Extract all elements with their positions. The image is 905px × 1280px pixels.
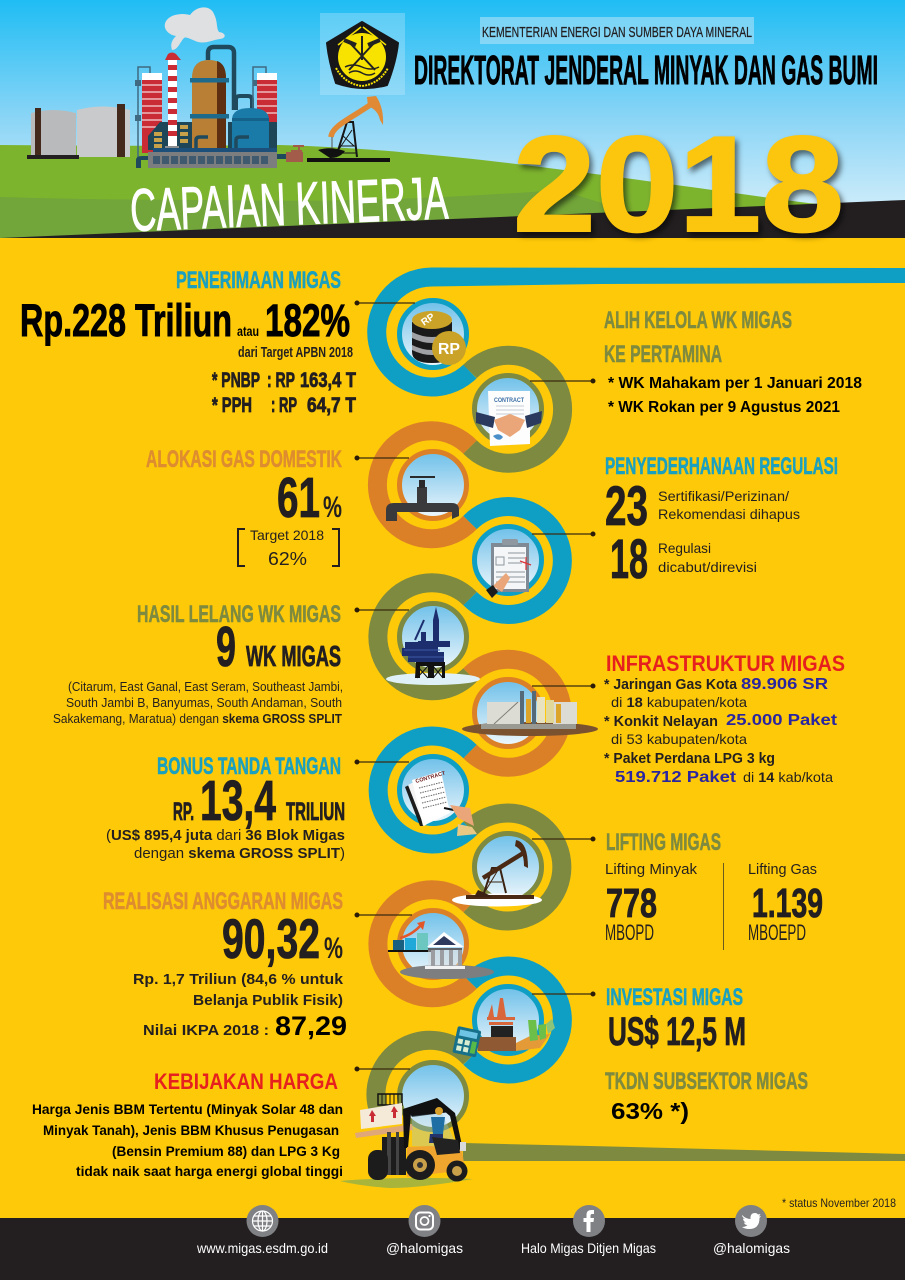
panel: investasi migas: INVESTASI MIGAS — [606, 984, 743, 1011]
panel: alokasi gas domestik: 61 — [277, 466, 320, 530]
icon: contract handshake — [476, 391, 542, 446]
panel: kebijakan harga — [32, 1069, 343, 1179]
panel: tkdn — [605, 1068, 808, 1124]
panel: bonus tanda tangan: BONUS TANDA TANGAN — [157, 753, 341, 780]
ministry name: KEMENTERIAN ENERGI DAN SUMBER DAYA MINERAL — [482, 24, 752, 41]
panel: realisasi anggaran: 87,29 — [275, 1011, 347, 1041]
panel: penerimaan migas: 64,7 T — [307, 394, 356, 417]
icon: budget bank — [388, 921, 494, 979]
footer contacts: www.migas.esdm.go.id — [196, 1240, 328, 1256]
icon: signing contract: CONTRACT — [415, 770, 447, 785]
panel: alokasi gas domestik: % — [323, 491, 342, 524]
illustration: storage tanks — [27, 104, 130, 159]
panel: infrastruktur migas: INFRASTRUKTUR MIGAS — [606, 651, 845, 676]
panel: penyederhanaan regulasi: 23 — [605, 474, 648, 537]
panel: realisasi anggaran: Belanja Publik Fisik) — [193, 992, 343, 1009]
footer contacts: Halo Migas Ditjen Migas — [521, 1240, 656, 1256]
panel: investasi migas: US$ 12,5 M — [608, 1010, 746, 1054]
panel: realisasi anggaran — [103, 888, 347, 1041]
panel: kebijakan harga: tidak naik saat harga energi global tinggi — [76, 1164, 343, 1179]
icon: oil pump — [452, 840, 542, 906]
icon: coins: RP — [438, 341, 460, 358]
title: 2018: 2018 — [513, 108, 844, 260]
icon: coins — [412, 311, 466, 365]
title: capaian kinerja: CAPAIAN KINERJA — [129, 164, 449, 244]
panel: lifting migas: 1.139 — [752, 880, 823, 926]
panel: infrastruktur migas: * Jaringan Gas Kota — [604, 677, 738, 693]
panel: alih kelola: KE PERTAMINA — [604, 341, 722, 368]
panel: bonus tanda tangan: (US$ 895,4 juta dari 36 Blok Migas — [106, 828, 345, 844]
panel: alokasi gas domestik: 62% — [268, 549, 307, 569]
panel: infrastruktur migas: 519.712 Paket — [615, 769, 736, 786]
panel: tkdn: TKDN SUBSEKTOR MIGAS — [605, 1068, 808, 1095]
panel: infrastruktur migas: di 14 kab/kota — [743, 769, 833, 785]
illustration: pump jack — [307, 96, 390, 162]
panel: penyederhanaan regulasi: Sertifikasi/Perizinan/ — [658, 488, 789, 504]
panel: lifting migas: MBOEPD — [748, 920, 806, 945]
panel: penerimaan migas — [20, 267, 356, 417]
panel: penerimaan migas: atau — [237, 323, 259, 339]
panel: kebijakan harga: Minyak Tanah), Jenis BBM Khusus Penugasan — [43, 1123, 339, 1138]
panel: penerimaan migas: 163,4 T — [300, 369, 356, 392]
panel: penyederhanaan regulasi — [605, 453, 838, 590]
panel: infrastruktur migas: di 18 kabupaten/kota — [611, 694, 747, 710]
panel: penerimaan migas: * PPH — [212, 394, 252, 417]
panel: penyederhanaan regulasi: Rekomendasi dihapus — [658, 506, 800, 522]
panel: bonus tanda tangan: dengan skema GROSS SPLIT ) — [134, 846, 345, 862]
illustration: smoke — [165, 7, 225, 50]
panel: alih kelola: * WK Rokan per 9 Agustus 2021 — [608, 399, 840, 416]
panel: realisasi anggaran: Nilai IKPA 2018 : — [143, 1022, 269, 1039]
panel: penerimaan migas: : RP — [267, 369, 295, 392]
panel: bonus tanda tangan — [106, 753, 345, 862]
panel: lifting migas: Lifting Gas — [748, 861, 817, 878]
panel: lifting migas — [605, 829, 823, 950]
panel: alih kelola: ALIH KELOLA WK MIGAS — [604, 307, 792, 334]
panel: infrastruktur migas: 89.906 SR — [741, 676, 828, 693]
icon: contract handshake: CONTRACT — [494, 397, 524, 404]
footer contacts: @halomigas — [713, 1240, 790, 1256]
panel: hasil lelang: WK MIGAS — [246, 641, 341, 673]
panel: alokasi gas domestik: Target 2018 — [250, 527, 324, 543]
icon: facebook — [573, 1205, 605, 1237]
panel: penyederhanaan regulasi: 18 — [610, 527, 648, 590]
icon: gas infrastructure — [462, 691, 598, 736]
panel: alokasi gas domestik: ALOKASI GAS DOMESTIK — [146, 446, 342, 473]
panel: hasil lelang: South Jambi B, Banyumas, South Andaman, South — [66, 695, 342, 710]
panel: hasil lelang — [53, 601, 343, 726]
panel: penerimaan migas: * PNBP — [212, 369, 260, 392]
logo plate — [320, 13, 405, 95]
panel: infrastruktur migas: 25.000 Paket — [726, 712, 837, 729]
panel: tkdn: 63% *) — [611, 1098, 689, 1124]
panel: infrastruktur migas: di 53 kabupaten/kota — [611, 731, 747, 747]
panel: realisasi anggaran: REALISASI ANGGARAN MIGAS — [103, 888, 343, 915]
illustration: refinery — [135, 47, 287, 168]
icon: twitter — [735, 1205, 767, 1237]
panel: kebijakan harga: KEBIJAKAN HARGA — [154, 1069, 338, 1094]
panel: realisasi anggaran: Rp. 1,7 Triliun (84,6 % untuk — [133, 971, 344, 988]
panel: infrastruktur migas — [604, 651, 845, 786]
header banner — [0, 0, 905, 260]
panel: penerimaan migas: 182% — [265, 295, 350, 346]
icon: offshore rig — [386, 607, 480, 685]
panel: alih kelola — [604, 307, 862, 416]
panel: bonus tanda tangan: RP. — [173, 798, 194, 826]
panel: hasil lelang: 9 — [216, 615, 236, 679]
icon: instagram — [408, 1205, 440, 1237]
panel: alokasi gas domestik — [146, 446, 342, 569]
panel: hasil lelang: HASIL LELANG WK MIGAS — [137, 601, 341, 628]
footer contacts — [196, 1240, 790, 1256]
panel: lifting migas: LIFTING MIGAS — [606, 829, 721, 856]
panel: lifting migas: 778 — [606, 880, 657, 926]
footer — [0, 1205, 905, 1280]
icon: forklift — [340, 1094, 473, 1188]
panel: penerimaan migas: Rp.228 Triliun — [20, 295, 232, 346]
panel: lifting migas: Lifting Minyak — [605, 861, 697, 878]
icon: coins: RP — [419, 311, 437, 328]
panel: hasil lelang: Sakakemang, Maratua) dengan skema GROSS SPLIT — [53, 711, 342, 726]
icon: clipboard — [486, 539, 531, 598]
panel: kebijakan harga: Harga Jenis BBM Tertentu (Minyak Solar 48 dan — [32, 1102, 343, 1117]
panel: penerimaan migas: : RP — [271, 394, 297, 417]
panel: bonus tanda tangan: 13,4 — [200, 769, 276, 833]
icon: signing contract — [405, 770, 477, 836]
panel: realisasi anggaran: 90,32 — [222, 907, 320, 970]
footer contacts: @halomigas — [386, 1240, 463, 1256]
panel: alih kelola: * WK Mahakam per 1 Januari 2018 — [608, 375, 862, 392]
panel: investasi migas — [606, 984, 746, 1054]
icon circles — [400, 300, 542, 1130]
icon: website — [246, 1205, 278, 1237]
panel: infrastruktur migas: * Konkit Nelayan — [604, 714, 718, 730]
panel: hasil lelang: (Citarum, East Ganal, East Seram, Southeast Jambi, — [68, 679, 343, 694]
panel: penyederhanaan regulasi: dicabut/direvisi — [658, 559, 757, 575]
panel: penyederhanaan regulasi: Regulasi — [658, 540, 711, 556]
panel: infrastruktur migas: * Paket Perdana LPG 3 kg — [604, 751, 775, 767]
illustration: pipe valve — [286, 145, 304, 162]
panel: realisasi anggaran: % — [324, 932, 343, 965]
ministry name — [480, 17, 754, 44]
icon: gas valve — [386, 477, 459, 521]
icon: investment — [452, 998, 555, 1057]
panel: kebijakan harga: (Bensin Premium 88) dan LPG 3 Kg — [112, 1144, 340, 1159]
panel: bonus tanda tangan: TRILIUN — [286, 798, 345, 826]
winding ribbon — [376, 268, 905, 1161]
leader lines — [354, 300, 596, 1072]
panel: lifting migas: MBOPD — [605, 920, 654, 945]
panel: penerimaan migas: PENERIMAAN MIGAS — [176, 267, 341, 294]
panel: penerimaan migas: dari Target APBN 2018 — [238, 344, 353, 361]
